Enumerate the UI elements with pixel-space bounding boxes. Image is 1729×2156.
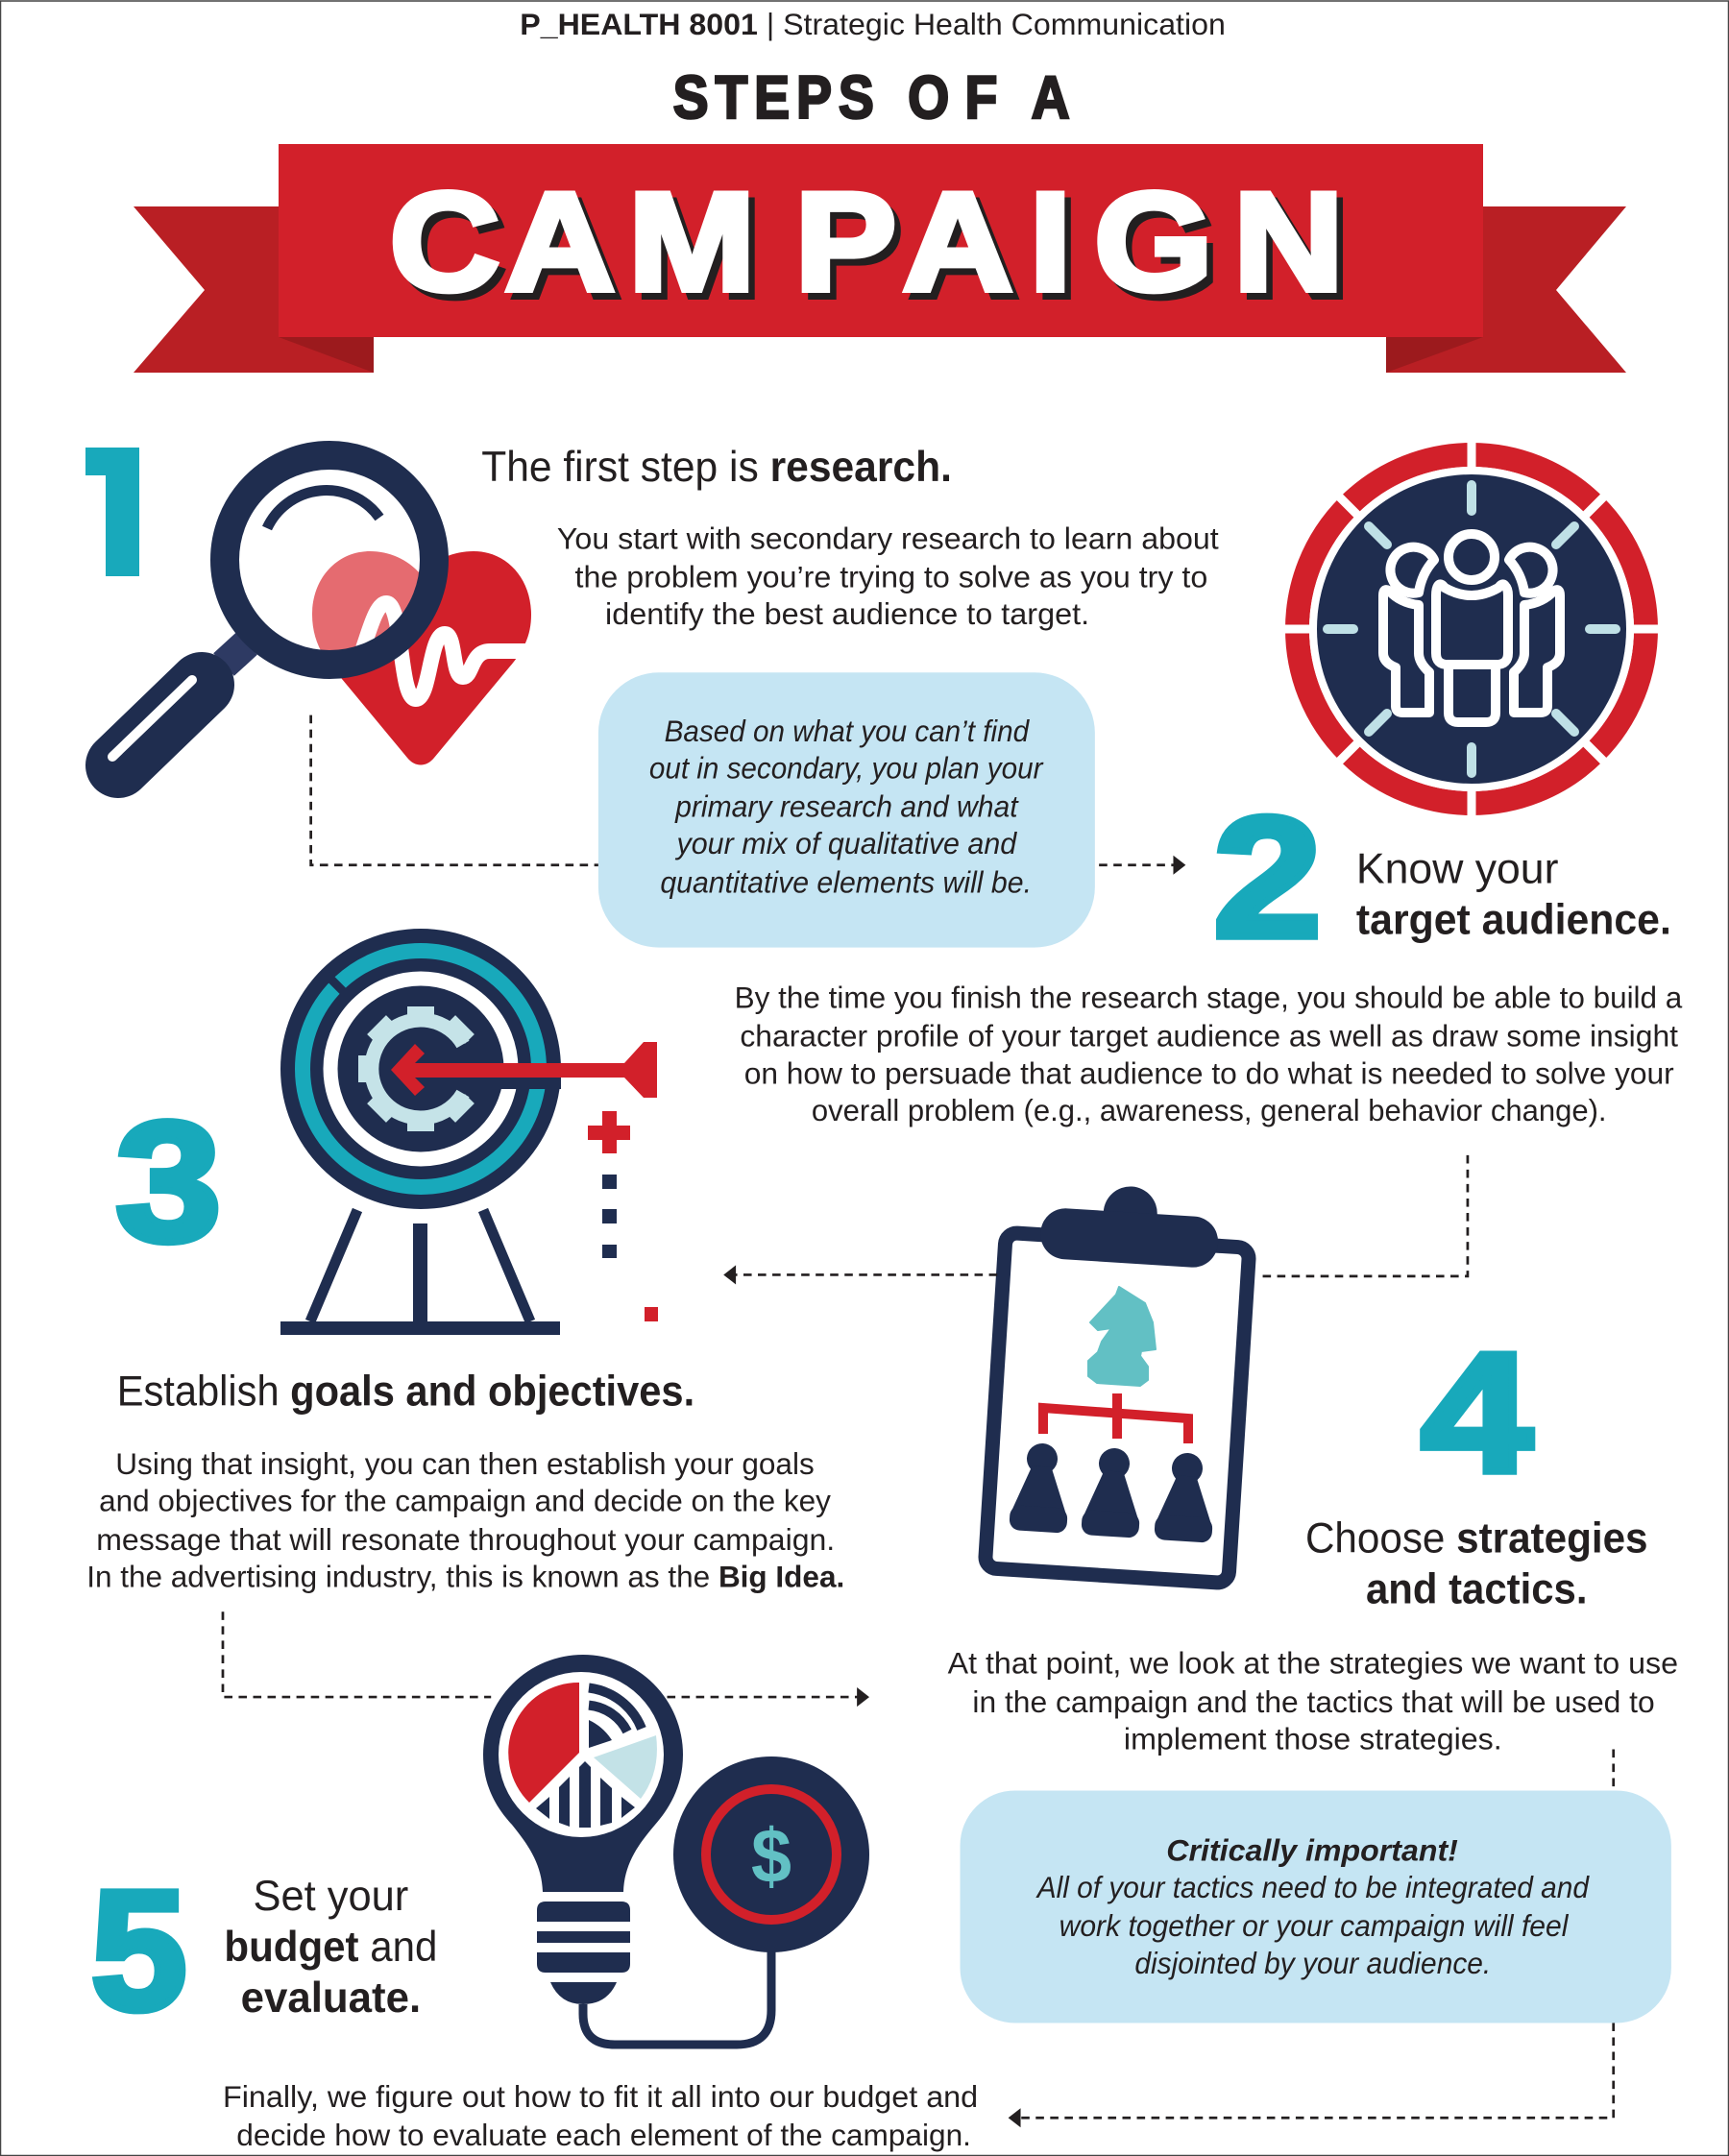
step 5 number: 5	[91, 1854, 187, 2046]
connector arrow: research to audience	[311, 715, 1185, 875]
callout: critically important: All of your tactics need to be integrated and	[1035, 1870, 1590, 1904]
step 2 body text	[735, 981, 1683, 1127]
step 2 body text: overall problem (e.g., awareness, general behavior change).	[812, 1093, 1607, 1127]
step 3 body text: message that will resonate throughout your campaign.	[96, 1522, 835, 1557]
step 2 body text: By the time you finish the research stage, you should be able to build a	[735, 981, 1683, 1015]
callout: critically important: Critically important!	[1166, 1832, 1458, 1867]
step 4 heading: Choose strategies	[1305, 1515, 1648, 1562]
step 4 number: 4	[1421, 1317, 1532, 1508]
step 1 heading: The first step is research.	[481, 444, 952, 491]
step 1 body text: the problem you’re trying to solve as you try to	[575, 559, 1207, 594]
step 2 number: 2	[1213, 781, 1322, 973]
callout: critically important	[961, 1790, 1671, 2023]
step 4 body text: At that point, we look at the strategies we want to use	[948, 1646, 1678, 1681]
connector arrow: strategies to budget	[1009, 1749, 1614, 2127]
step 3 body text: and objectives for the campaign and decide on the key	[99, 1484, 831, 1518]
connector arrow: goals to strategies	[223, 1611, 869, 1707]
step 5 heading: budget and	[224, 1924, 437, 1971]
callout: primary research	[598, 672, 1095, 948]
step 3 body text: In the advertising industry, this is known as the Big Idea.	[86, 1560, 844, 1594]
icon: clipboard with chess pieces	[985, 1178, 1253, 1584]
step 3 body text: Using that insight, you can then establish your goals	[115, 1446, 815, 1481]
step 2 body text: on how to persuade that audience to do what is needed to solve your	[744, 1055, 1674, 1090]
callout: primary research: your mix of qualitative and	[675, 826, 1017, 860]
step 5 body text	[223, 2079, 978, 2152]
callout: critically important: disjointed by your audience.	[1134, 1946, 1491, 1980]
icon: light bulb, pie chart and coin	[483, 1655, 869, 2045]
step 2 heading: target audience.	[1356, 896, 1671, 943]
step 3 heading: Establish goals and objectives.	[117, 1368, 694, 1415]
step 5 heading: Set your	[253, 1873, 409, 1920]
callout: primary research: primary research and what	[674, 789, 1019, 824]
step 4 body text	[948, 1646, 1678, 1756]
callout: primary research: quantitative elements will be.	[660, 864, 1032, 899]
step 4 body text: in the campaign and the tactics that will be used to	[972, 1684, 1655, 1719]
step 2 heading	[1356, 845, 1671, 943]
step 5 body text: decide how to evaluate each element of the campaign.	[236, 2118, 971, 2152]
step 3 body text	[86, 1446, 844, 1594]
connector arrow: audience to goals	[723, 1155, 1468, 1284]
icon: magnifying glass over heart	[112, 455, 548, 765]
step 1 body text: identify the best audience to target.	[605, 596, 1089, 631]
callout: critically important: work together or your campaign will feel	[1059, 1908, 1569, 1943]
title: steps of a	[673, 63, 1070, 132]
title: CAMPAIGN: CAMPAIGN	[389, 164, 1344, 321]
callout: primary research: Based on what you can’t find	[665, 714, 1030, 748]
step 5 heading	[224, 1873, 437, 2022]
step 1 number: 1	[67, 416, 165, 614]
step 2 heading: Know your	[1356, 845, 1559, 892]
title: steps of a: A	[1032, 63, 1070, 132]
header line: P_HEALTH 8001 | Strategic Health Communication	[520, 7, 1226, 41]
step 5 heading: evaluate.	[241, 1974, 421, 2022]
callout: primary research: out in secondary, you plan your	[649, 751, 1044, 786]
step 2 body text: character profile of your target audience as well as draw some insight	[740, 1019, 1678, 1054]
step 3 number: 3	[115, 1086, 222, 1277]
step 1 body text: You start with secondary research to learn about	[557, 521, 1219, 555]
title: CAMPAIGN: CAMPAIGN	[396, 171, 1350, 327]
step 4 heading: and tactics.	[1366, 1566, 1588, 1613]
step 5 body text: Finally, we figure out how to fit it all into our budget and	[223, 2079, 978, 2114]
title: steps of a: OF	[908, 63, 997, 132]
icon: target with arrow	[280, 929, 658, 1335]
step 4 heading	[1305, 1515, 1648, 1613]
step 1 body text	[557, 521, 1219, 631]
banner ribbon	[134, 144, 1626, 373]
title: steps of a: STEPS	[673, 63, 874, 132]
icon: light bulb, pie chart and coin: $	[751, 1813, 791, 1899]
icon: target audience	[1273, 423, 1670, 836]
step 4 body text: implement those strategies.	[1124, 1721, 1502, 1756]
